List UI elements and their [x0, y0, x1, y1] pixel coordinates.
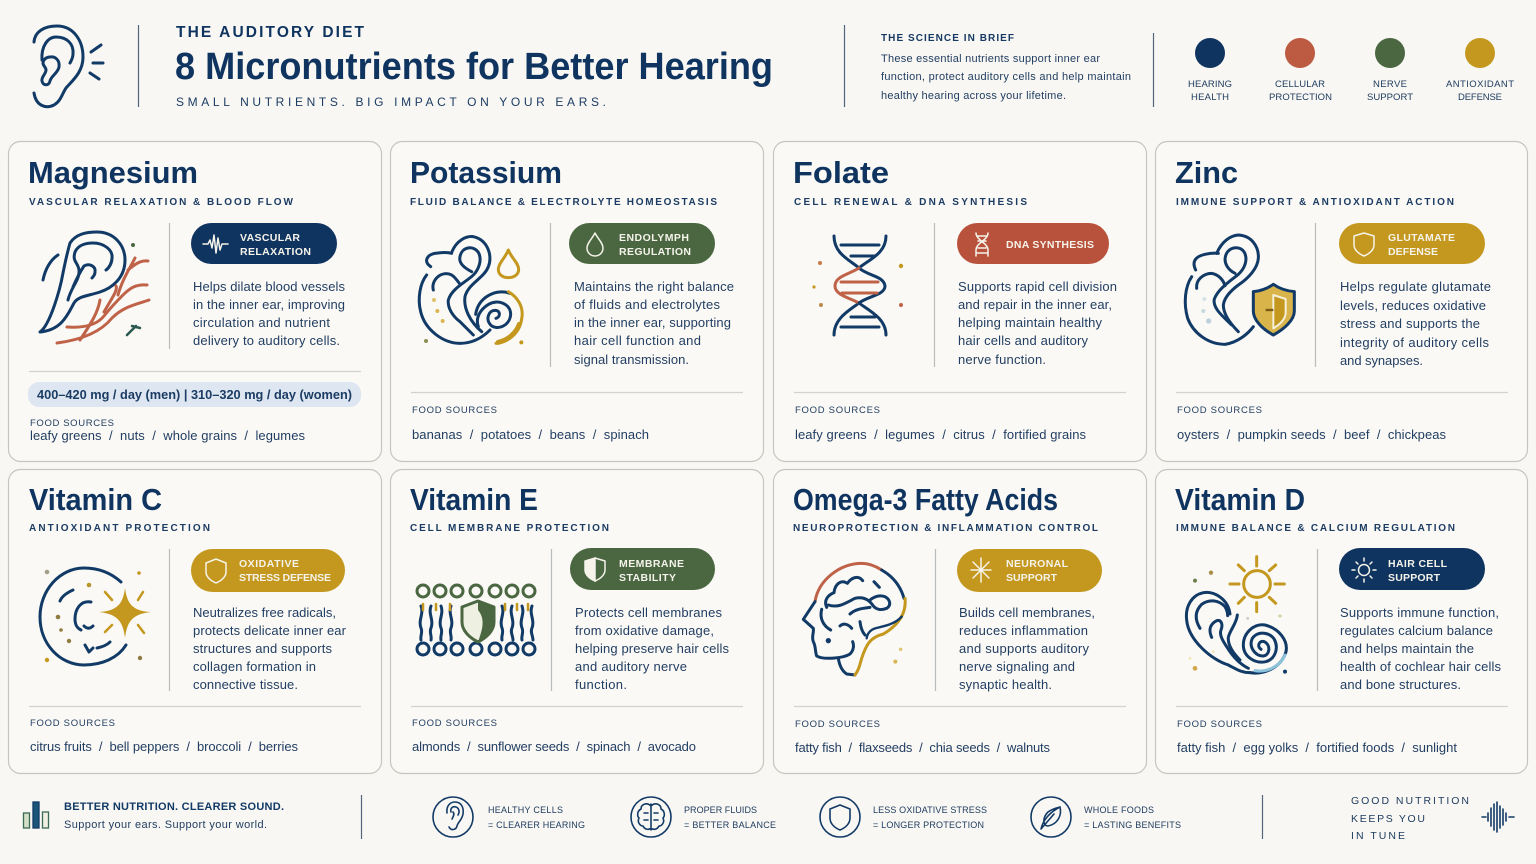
legend: cellular protection: CELLULAR — [1275, 79, 1325, 90]
badge: vascular relaxation: VASCULAR — [240, 232, 300, 244]
legend: nerve support: SUPPORT — [1367, 92, 1413, 103]
heading: Vitamin C — [29, 483, 162, 517]
badge: glutamate defense: GLUTAMATE — [1388, 232, 1455, 244]
benefit: proper fluids: = BETTER BALANCE — [684, 820, 776, 830]
icon: head with brain — [803, 563, 905, 675]
description: Supports rapid cell division — [958, 279, 1117, 294]
panel: Omega-3 Fatty Acids — [774, 470, 1146, 774]
description: and supports auditory — [959, 641, 1090, 656]
description: hair cell function and — [574, 333, 701, 348]
description: Neutralizes free radicals, — [193, 605, 336, 620]
kicker: THE AUDITORY DIET — [176, 24, 365, 41]
benefit: healthy cells: = CLEARER HEARING — [488, 820, 585, 830]
description: and synapses. — [1340, 353, 1423, 368]
benefit: whole foods — [1031, 797, 1181, 837]
badge: hair cell support: SUPPORT — [1388, 572, 1441, 584]
description: health of cochlear hair cells — [1340, 659, 1502, 674]
description: nerve signaling and — [959, 659, 1075, 674]
legend: nerve support: NERVE — [1373, 79, 1407, 90]
icon: ear, cochlea and sun — [1186, 557, 1287, 674]
science in brief: function, protect auditory cells and help maintain — [881, 71, 1131, 83]
description: signal transmission. — [574, 352, 689, 367]
badge: vascular relaxation — [191, 223, 337, 264]
heading: Potassium — [410, 156, 562, 190]
legend: antioxidant defense — [1446, 38, 1514, 103]
benefit: proper fluids — [631, 797, 776, 837]
benefit: whole foods: = LASTING BENEFITS — [1084, 820, 1181, 830]
badge: membrane stability: MEMBRANE — [619, 558, 684, 570]
benefit: healthy cells — [433, 797, 585, 837]
subtitle: ANTIOXIDANT PROTECTION — [29, 523, 210, 534]
benefit: whole foods: WHOLE FOODS — [1084, 805, 1154, 815]
icon: cell with antioxidant sparkle — [40, 568, 151, 665]
food sources: FOOD SOURCES — [1177, 719, 1262, 730]
description: nerve function. — [958, 352, 1046, 367]
description — [959, 605, 1095, 692]
dose pill — [28, 382, 361, 407]
food sources: FOOD SOURCES — [795, 405, 880, 416]
food sources: fatty fish / egg yolks / fortified foods / sunlight — [1177, 740, 1457, 755]
benefit: healthy cells: HEALTHY CELLS — [488, 805, 563, 815]
badge: endolymph regulation: REGULATION — [619, 246, 691, 258]
panel: Potassium — [390, 142, 764, 462]
description: Maintains the right balance — [574, 279, 734, 294]
description: in the inner ear, improving — [193, 297, 345, 312]
description: collagen formation in — [193, 659, 316, 674]
panel: Folate — [774, 142, 1146, 462]
food sources — [1177, 719, 1457, 755]
legend: antioxidant defense: ANTIOXIDANT — [1446, 79, 1514, 90]
legend: hearing health: HEARING — [1188, 79, 1232, 90]
icon: membrane with shield — [417, 585, 535, 655]
description: levels, reduces oxidative — [1340, 298, 1486, 313]
dose pill: 400–420 mg / day (men) | 310–320 mg / day (women) — [37, 387, 352, 402]
benefit: less oxidative stress: LESS OXIDATIVE STRESS — [873, 805, 987, 815]
description: helping preserve hair cells — [575, 641, 730, 656]
heading: Vitamin E — [410, 483, 538, 517]
badge: membrane stability: STABILITY — [619, 572, 676, 584]
badge: oxidative stress defense — [191, 549, 345, 592]
subtitle: IMMUNE SUPPORT & ANTIOXIDANT ACTION — [1176, 197, 1454, 208]
description: from oxidative damage, — [575, 623, 714, 638]
badge: neuronal support — [957, 549, 1102, 592]
panel: Zinc — [1156, 142, 1528, 462]
description: and bone structures. — [1340, 677, 1461, 692]
icon: ear with shield — [1185, 235, 1294, 344]
badge: endolymph regulation — [569, 223, 715, 264]
tagline — [64, 801, 284, 831]
tagline: Support your ears. Support your world. — [64, 819, 267, 831]
footer — [24, 795, 1514, 842]
description: synaptic health. — [959, 677, 1052, 692]
description: and auditory nerve — [575, 659, 687, 674]
subtitle: IMMUNE BALANCE & CALCIUM REGULATION — [1176, 523, 1455, 534]
food sources — [412, 718, 696, 754]
food sources: fatty fish / flaxseeds / chia seeds / walnuts — [795, 740, 1050, 755]
description — [575, 605, 730, 692]
icon: DNA helix — [812, 236, 903, 335]
description: hair cells and auditory — [958, 333, 1088, 348]
badge: neuronal support: NEURONAL — [1006, 558, 1069, 570]
closing message: GOOD NUTRITION — [1351, 795, 1469, 807]
food sources — [30, 418, 306, 443]
icon: cochlea with drop — [419, 237, 523, 344]
subtitle: CELL RENEWAL & DNA SYNTHESIS — [794, 197, 1027, 208]
panel: Vitamin E — [390, 470, 764, 774]
food sources: almonds / sunflower seeds / spinach / avocado — [412, 739, 696, 754]
description: stress and supports the — [1340, 316, 1480, 331]
legend: hearing health — [1188, 38, 1232, 103]
heading: Vitamin D — [1175, 483, 1305, 517]
description: in the inner ear, supporting — [574, 315, 731, 330]
closing message: IN TUNE — [1351, 830, 1405, 842]
description: integrity of auditory cells — [1340, 335, 1490, 350]
science in brief: THE SCIENCE IN BRIEF — [881, 33, 1014, 44]
science in brief: These essential nutrients support inner ear — [881, 53, 1100, 65]
tagline: SMALL NUTRIENTS. BIG IMPACT ON YOUR EARS. — [176, 95, 606, 109]
food sources — [795, 719, 1050, 755]
header — [34, 24, 1514, 109]
science in brief — [881, 33, 1131, 102]
food sources: FOOD SOURCES — [1177, 405, 1262, 416]
food sources: citrus fruits / bell peppers / broccoli / berries — [30, 739, 298, 754]
food sources: leafy greens / nuts / whole grains / legumes — [30, 428, 306, 443]
food sources: FOOD SOURCES — [30, 718, 115, 729]
food sources — [795, 405, 1086, 442]
badge: membrane stability — [570, 548, 715, 590]
closing message — [1351, 795, 1469, 842]
description: regulates calcium balance — [1340, 623, 1493, 638]
food sources: FOOD SOURCES — [795, 719, 880, 730]
badge: DNA synthesis — [957, 223, 1109, 264]
food sources — [412, 405, 649, 442]
badge: hair cell support — [1339, 548, 1485, 590]
benefit: less oxidative stress — [820, 797, 987, 837]
badge: oxidative stress defense: STRESS DEFENSE — [239, 572, 331, 584]
badge: glutamate defense: DEFENSE — [1388, 246, 1438, 258]
icon: ear with blood vessels — [40, 232, 149, 343]
description: circulation and nutrient — [193, 315, 330, 330]
description: reduces inflammation — [959, 623, 1088, 638]
description — [574, 279, 734, 367]
badge: oxidative stress defense: OXIDATIVE — [239, 558, 299, 570]
subtitle: NEUROPROTECTION & INFLAMMATION CONTROL — [793, 523, 1098, 534]
subtitle: FLUID BALANCE & ELECTROLYTE HOMEOSTASIS — [410, 197, 717, 208]
description: delivery to auditory cells. — [193, 333, 340, 348]
description: Helps regulate glutamate — [1340, 279, 1491, 294]
description: structures and supports — [193, 641, 332, 656]
legend: cellular protection — [1269, 38, 1332, 103]
description — [193, 279, 346, 348]
food sources: FOOD SOURCES — [30, 418, 114, 429]
food sources: FOOD SOURCES — [412, 718, 497, 729]
legend: hearing health: HEALTH — [1191, 92, 1229, 103]
legend: nerve support — [1367, 38, 1413, 103]
badge: endolymph regulation: ENDOLYMPH — [619, 232, 689, 244]
icon: bars — [24, 802, 48, 828]
title: 8 Micronutrients for Better Hearing — [175, 46, 773, 88]
badge: neuronal support: SUPPORT — [1006, 572, 1058, 584]
food sources: leafy greens / legumes / citrus / fortified grains — [795, 427, 1086, 442]
description: Builds cell membranes, — [959, 605, 1095, 620]
benefit: proper fluids: PROPER FLUIDS — [684, 805, 757, 815]
description: function. — [575, 677, 627, 692]
badge: DNA synthesis: DNA SYNTHESIS — [1006, 239, 1094, 251]
panel: Vitamin C — [8, 470, 382, 774]
description: protects delicate inner ear — [193, 623, 347, 638]
closing message: KEEPS YOU — [1351, 813, 1425, 825]
heading: Zinc — [1175, 156, 1238, 190]
badge: vascular relaxation: RELAXATION — [240, 246, 311, 258]
food sources — [30, 718, 298, 754]
description: Protects cell membranes — [575, 605, 722, 620]
description: of fluids and electrolytes — [574, 297, 720, 312]
badge: hair cell support: HAIR CELL — [1388, 558, 1448, 570]
description: helping maintain healthy — [958, 315, 1102, 330]
description: and repair in the inner ear, — [958, 297, 1112, 312]
tagline: BETTER NUTRITION. CLEARER SOUND. — [64, 801, 284, 813]
food sources — [1177, 405, 1446, 442]
subtitle: VASCULAR RELAXATION & BLOOD FLOW — [29, 197, 294, 208]
legend: cellular protection: PROTECTION — [1269, 92, 1332, 103]
icon: waveform — [1482, 802, 1514, 832]
description: Supports immune function, — [1340, 605, 1499, 620]
food sources: bananas / potatoes / beans / spinach — [412, 427, 649, 442]
benefit: less oxidative stress: = LONGER PROTECTION — [873, 820, 984, 830]
panel: Magnesium — [8, 142, 382, 462]
food sources: oysters / pumpkin seeds / beef / chickpeas — [1177, 427, 1446, 442]
icon: ear with sound lines — [34, 26, 103, 107]
badge: glutamate defense — [1339, 223, 1485, 264]
description — [1340, 279, 1491, 368]
description — [958, 279, 1117, 367]
description — [1340, 605, 1502, 692]
food sources: FOOD SOURCES — [412, 405, 497, 416]
description: Helps dilate blood vessels — [193, 279, 346, 294]
subtitle: CELL MEMBRANE PROTECTION — [410, 523, 609, 534]
heading: Magnesium — [28, 156, 198, 190]
description — [193, 605, 347, 692]
description: and helps maintain the — [1340, 641, 1474, 656]
panel: Vitamin D — [1156, 470, 1528, 774]
heading: Omega-3 Fatty Acids — [793, 483, 1058, 517]
heading: Folate — [793, 156, 889, 190]
description: connective tissue. — [193, 677, 298, 692]
legend: antioxidant defense: DEFENSE — [1458, 92, 1502, 103]
science in brief: healthy hearing across your lifetime. — [881, 90, 1066, 102]
